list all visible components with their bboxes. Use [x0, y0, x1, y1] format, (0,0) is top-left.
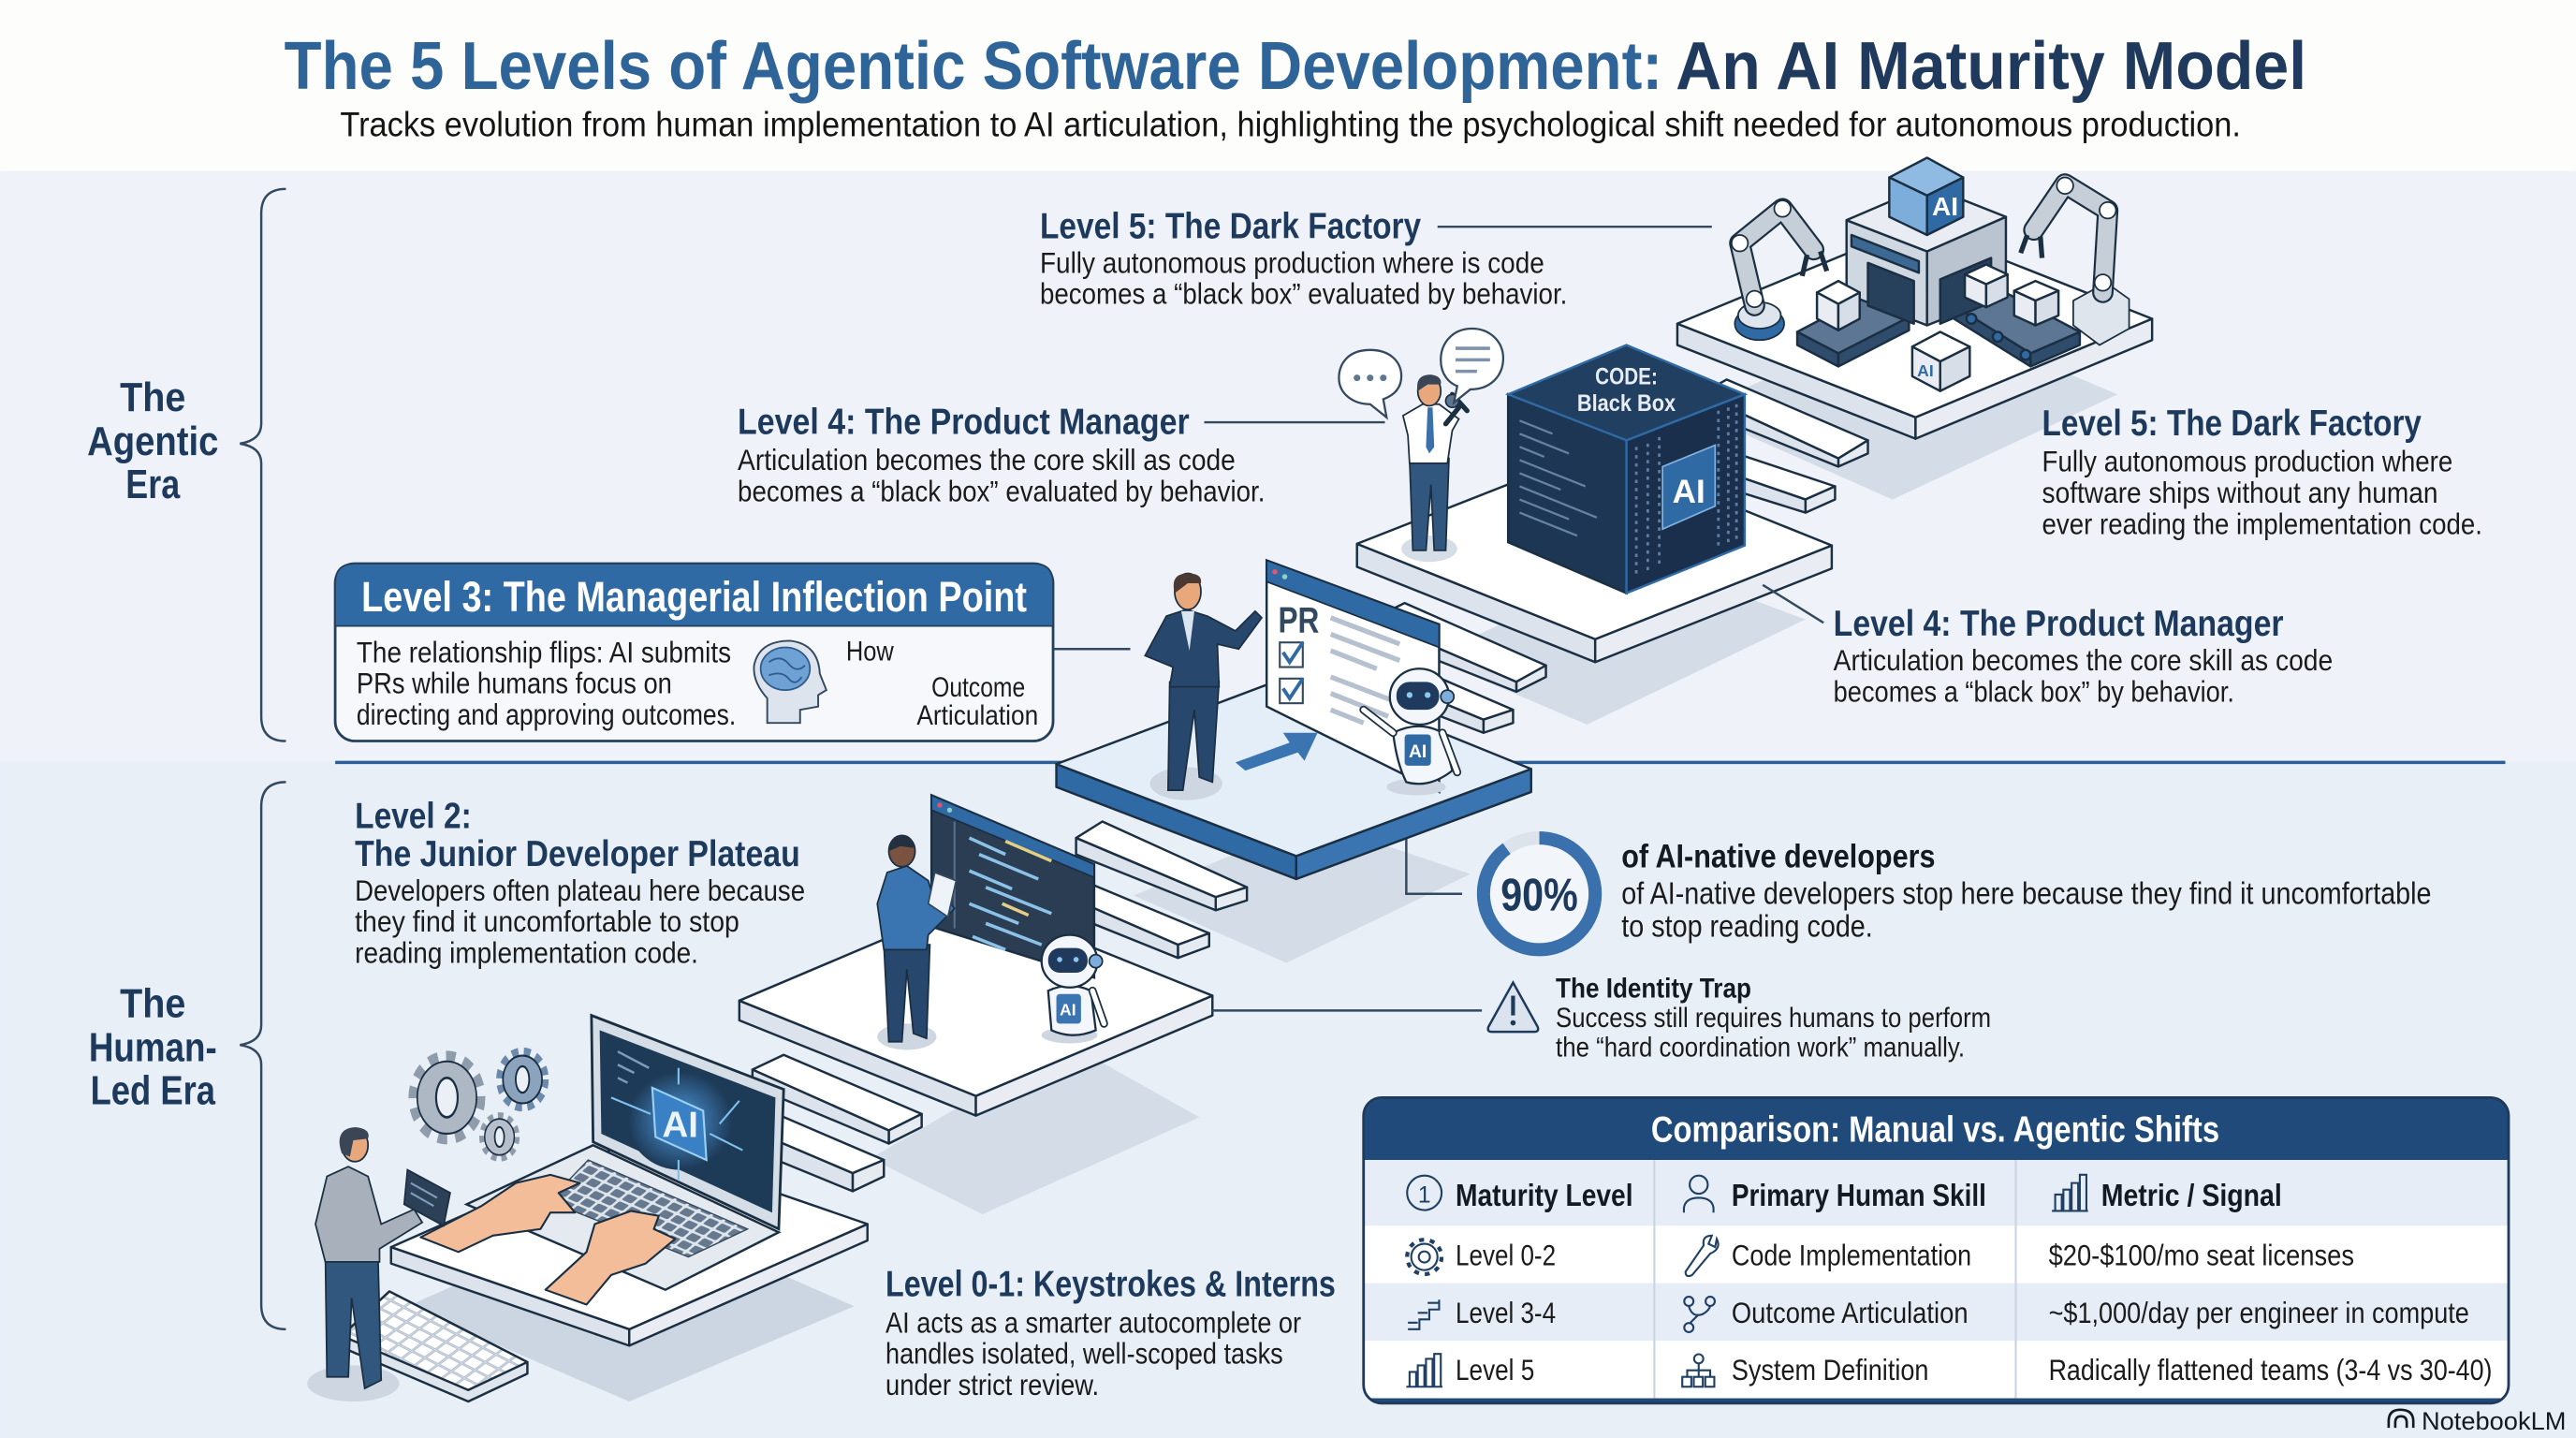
text: level 4 upper: becomes a “black box” evaluated by behavior.: [738, 474, 1265, 507]
icon: code black box cube: Black Box: [1577, 391, 1676, 417]
platform: level 4 product manager: [1339, 329, 1832, 662]
label: the human-led era: Human-: [89, 1025, 217, 1071]
icon: robot assistant level 2: AI: [1060, 1001, 1076, 1020]
label: the human-led era: The: [120, 980, 185, 1026]
icon: laptop: [466, 1016, 783, 1290]
text: level 5 upper: Fully autonomous production where is code: [1040, 245, 1544, 279]
icon: brain head: [754, 640, 827, 723]
icon: laptop: AI: [662, 1105, 698, 1145]
platform: level 3 managerial inflection: [1057, 560, 1531, 879]
panel: level 3 card: PRs while humans focus on: [357, 667, 672, 700]
panel: level 3 card: [335, 564, 1131, 741]
icon: pr window: PR: [1278, 601, 1319, 641]
text: level 4 upper: [738, 402, 1385, 507]
icon: product manager figure: [1401, 374, 1467, 562]
icon: typing hands: [420, 1175, 675, 1304]
text: level 5 right: Level 5: The Dark Factory: [2042, 404, 2422, 444]
panel: comparison table: Primary Human Skill: [1732, 1179, 1986, 1213]
connector: level 3 to 90 percent: [1406, 822, 1462, 894]
text: level 2: The Junior Developer Plateau: [355, 834, 800, 874]
text: level 5 right: Fully autonomous production where: [2042, 445, 2452, 478]
icon: right robot arm: [2021, 178, 2130, 345]
icon: speech bubble dots: [1339, 350, 1401, 418]
panel: comparison table: Radically flattened teams (3-4 vs 30-40): [2049, 1353, 2492, 1387]
icon: developer figure: [877, 835, 956, 1049]
panel: comparison table: ~$1,000/day per engineer in compute: [2049, 1296, 2469, 1329]
platform: level 5 dark factory: [1677, 157, 2152, 439]
panel: comparison table: System Definition: [1732, 1353, 1928, 1387]
chart: 90 percent ring: 90%: [1500, 870, 1578, 920]
panel: level 3 card: Articulation: [916, 700, 1038, 731]
text: level 4 right: Articulation becomes the core skill as code: [1834, 643, 2333, 677]
icon: person: [1684, 1176, 1714, 1212]
text: level 0-1: [886, 1265, 1336, 1401]
panel: comparison table: Metric / Signal: [2101, 1179, 2282, 1213]
icon: ai cube: [1889, 157, 1963, 235]
label: the human-led era: [89, 980, 217, 1113]
icon: pr window: [1266, 560, 1439, 792]
icon: packages: AI: [1917, 361, 1934, 380]
text: level 5 upper: [1040, 206, 1712, 311]
icon: nodes: [1684, 1297, 1715, 1332]
icon: warning triangle: [1488, 983, 1538, 1032]
icon: code black box cube: [1508, 345, 1745, 594]
panel: comparison table: $20-$100/mo seat licenses: [2049, 1238, 2354, 1271]
steps: level 3 to 4: [1364, 603, 1546, 733]
icon: code black box cube: CODE:: [1595, 365, 1658, 390]
panel: level 3 card: directing and approving outcomes.: [357, 697, 736, 731]
panel: comparison table: Maturity Level: [1456, 1179, 1633, 1213]
icon: code screen: [931, 795, 1094, 977]
panel: comparison table: [1364, 1097, 2509, 1403]
platform: level 0-1 shadow: [407, 1208, 855, 1401]
icon: wrench: [1686, 1236, 1719, 1276]
label: the agentic era: [87, 374, 218, 507]
text: level 5 right: ever reading the implementation code.: [2042, 506, 2482, 540]
chart: 90 percent ring: [1484, 838, 1595, 949]
text: level 4 upper: Level 4: The Product Manager: [738, 402, 1190, 442]
text: level 5 upper: Level 5: The Dark Factory: [1040, 206, 1422, 246]
icon: conveyor belts: [1797, 286, 2080, 366]
icon: robot assistant level 3: [1364, 668, 1457, 795]
icon: gears: [413, 1051, 546, 1158]
text: ai-native developers: [1621, 839, 2431, 944]
text: level 0-1: under strict review.: [886, 1368, 1099, 1401]
icon: factory building: [1847, 185, 2006, 325]
platform: level 2 shadow: [871, 1043, 1199, 1214]
icon: left robot arm: [1732, 200, 1827, 340]
panel: comparison table: Level 0-2: [1456, 1238, 1556, 1271]
steps: level 4 to 5: [1701, 379, 1868, 513]
panel: level 3 card: The relationship flips: AI submits: [357, 635, 731, 668]
steps: level 0-1 to 2: [753, 1055, 922, 1191]
icon: robot assistant level 3: AI: [1409, 742, 1427, 762]
notebooklm mark: NotebookLM: [2422, 1406, 2566, 1435]
icon: manager in suit: [1145, 574, 1262, 800]
panel: comparison table: Outcome Articulation: [1732, 1296, 1969, 1329]
text: ai-native developers: to stop reading code.: [1621, 909, 1873, 944]
icon: ai cube: AI: [1932, 192, 1958, 221]
icon: bars: [2052, 1175, 2088, 1211]
brace: agentic era: [240, 189, 285, 741]
text: level 4 upper: Articulation becomes the core skill as code: [738, 443, 1236, 477]
text: identity trap: the “hard coordination work” manually.: [1556, 1032, 1965, 1063]
text: identity trap: Success still requires humans to perform: [1556, 1003, 1991, 1034]
platform: level 2 junior developer: [739, 795, 1212, 1116]
panel: level 3 card: Level 3: The Managerial Inflection Point: [361, 573, 1027, 621]
icon: gear: [1407, 1240, 1442, 1274]
icon: blue arrow: [1236, 733, 1318, 770]
panel: level 3 card: Outcome: [931, 672, 1025, 703]
text: identity trap: [1556, 973, 1991, 1063]
text: ai-native developers: of AI-native developers stop here because they find it uncomfortable: [1621, 876, 2431, 911]
panel: comparison table: Code Implementation: [1732, 1238, 1971, 1271]
icon: developer at tablet: [307, 1127, 450, 1401]
text: level 2: reading implementation code.: [355, 935, 698, 969]
text: level 2: Developers often plateau here because: [355, 873, 805, 907]
text: level 0-1: AI acts as a smarter autocomplete or: [886, 1305, 1301, 1339]
platform: level 0-1 keystrokes: [391, 1016, 868, 1345]
text: level 2: they find it uncomfortable to stop: [355, 904, 739, 938]
icon: org chart: [1682, 1354, 1714, 1387]
brace: human-led era: [240, 782, 285, 1329]
icon: external keyboard: [342, 1291, 527, 1401]
text: level 4 right: [1763, 585, 2333, 708]
text: level 2: Level 2:: [355, 797, 472, 837]
icon: numbered circle: 1: [1418, 1183, 1431, 1209]
title: An AI Maturity Model: [1676, 29, 2306, 104]
label: the human-led era: Led Era: [91, 1067, 215, 1113]
panel: comparison table: Comparison: Manual vs. Agentic Shifts: [1651, 1110, 2219, 1151]
label: the agentic era: Agentic: [87, 418, 218, 464]
label: the agentic era: The: [120, 374, 185, 420]
text: level 4 right: Level 4: The Product Manager: [1834, 604, 2284, 644]
text: ai-native developers: of AI-native developers: [1621, 839, 1935, 875]
text: level 4 right: becomes a “black box” by behavior.: [1834, 674, 2234, 708]
title: The 5 Levels of Agentic Software Development:: [285, 29, 1662, 104]
steps: level 2 to 3: [1076, 822, 1247, 958]
panel: comparison table: Level 5: [1456, 1353, 1534, 1387]
text: level 5 right: software ships without any human: [2042, 476, 2438, 509]
text: level 0-1: Level 0-1: Keystrokes & Interns: [886, 1265, 1336, 1305]
icon: numbered circle: [1407, 1176, 1442, 1211]
panel: comparison table: Level 3-4: [1456, 1296, 1556, 1329]
subtitle: Tracks evolution from human implementation to AI articulation, highlighting the psychological shift needed for autonomous production.: [340, 106, 2241, 144]
text: level 0-1: handles isolated, well-scoped tasks: [886, 1337, 1283, 1371]
icon: flow steps: [1408, 1299, 1439, 1329]
label: the agentic era: Era: [125, 462, 181, 507]
icon: code black box cube: AI: [1673, 474, 1705, 510]
platform: level 5 shadow: [1692, 312, 2117, 500]
text: level 5 upper: becomes a “black box” evaluated by behavior.: [1040, 277, 1567, 311]
platform: level 3 shadow: [1134, 822, 1471, 962]
platform: level 4 shadow: [1429, 559, 1806, 725]
icon: bars small: [1406, 1354, 1442, 1387]
icon: robot assistant level 2: [1042, 935, 1104, 1043]
icon: speech bubble lines: [1441, 329, 1503, 403]
text: level 5 right: [2042, 404, 2482, 540]
text: level 2: [355, 797, 805, 969]
panel: level 3 card: How: [846, 637, 894, 668]
icon: packages: [1817, 265, 2058, 391]
connector: level 2 to identity trap: [1212, 1009, 1482, 1011]
text: identity trap: The Identity Trap: [1556, 973, 1751, 1004]
